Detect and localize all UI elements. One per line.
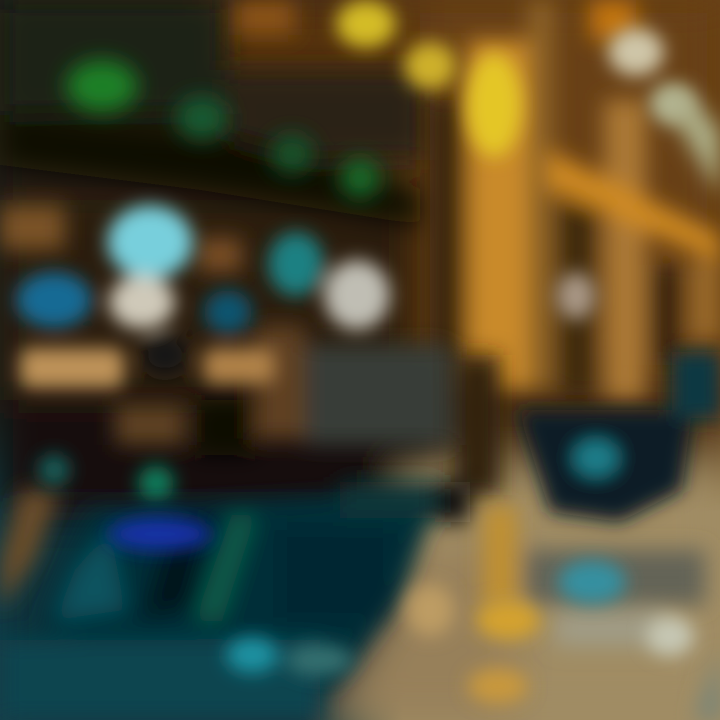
right columns and beams [235, 0, 720, 400]
yellow lights [336, 0, 694, 320]
middle left lights [16, 205, 390, 503]
dark cup on the right [518, 352, 720, 522]
laptop lights [108, 517, 354, 676]
laptop bottom left [0, 482, 470, 720]
bottom right table reflections [483, 505, 720, 720]
table lights [406, 560, 694, 704]
middle left screens and blocks [0, 205, 500, 610]
upper left panel and shelf band [0, 0, 425, 225]
green lights [66, 60, 380, 198]
